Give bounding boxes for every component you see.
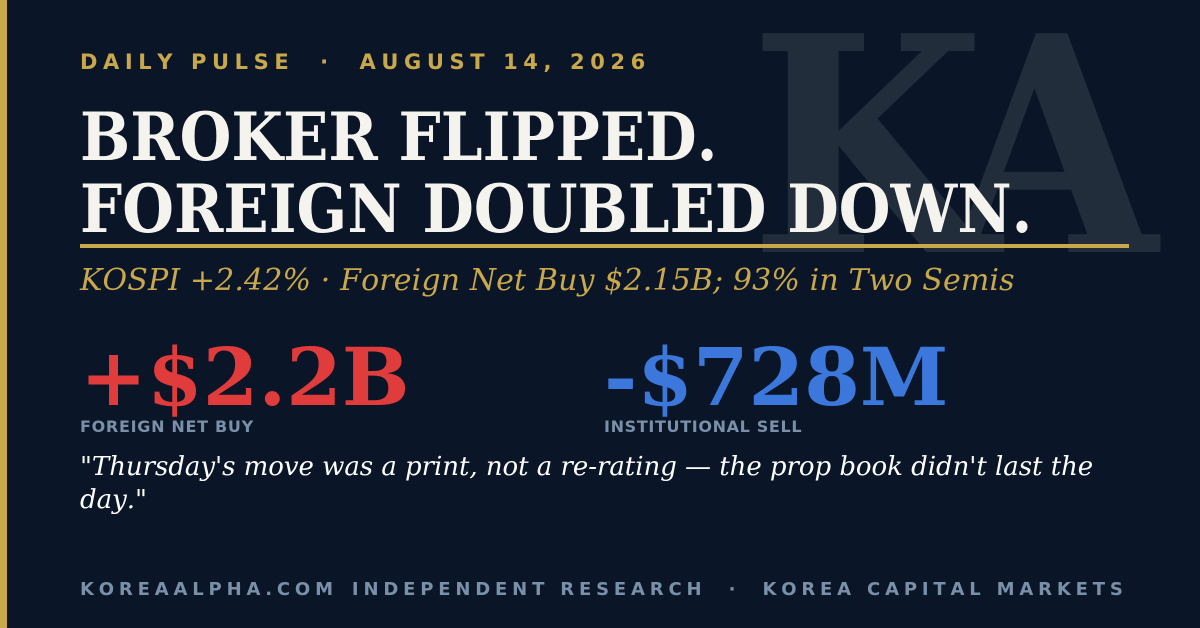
quote: day." [80,485,147,515]
quote [80,452,1093,515]
stat: institutional sell [604,330,948,436]
gold rule [80,244,1129,248]
left accent bar [0,0,7,628]
quote: "Thursday's move was a print, not a re-rating — the prop book didn't last the [80,452,1093,482]
foreign value: +$2.2B [80,330,410,424]
stat: foreign net buy [80,330,410,436]
headline [80,98,1032,248]
subheading: KOSPI +2.42% · Foreign Net Buy $2.15B; 93% in Two Semis [80,263,1015,298]
footer: KOREAALPHA.COM INDEPENDENT RESEARCH · KOREA CAPITAL MARKETS [80,579,1128,600]
foreign label: FOREIGN NET BUY [80,417,254,436]
headline: FOREIGN DOUBLED DOWN. [80,170,1032,248]
institutional label: INSTITUTIONAL SELL [604,417,802,436]
institutional value: -$728M [604,330,948,424]
eyebrow date line: DAILY PULSE · AUGUST 14, 2026 [80,50,651,74]
headline: BROKER FLIPPED. [80,98,717,176]
